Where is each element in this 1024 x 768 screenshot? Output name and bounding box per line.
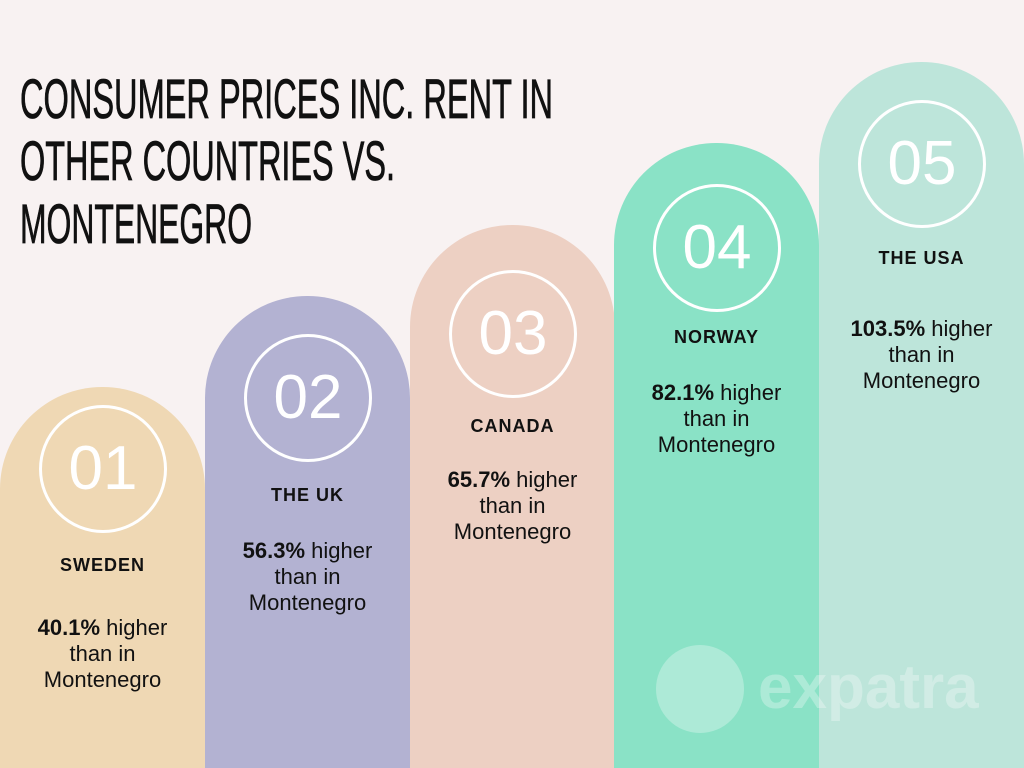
country label: SWEDEN [60, 555, 145, 575]
country label: THE UK [271, 485, 344, 505]
number 03: 03 [479, 299, 547, 368]
number 03 [449, 270, 577, 398]
country label: CANADA [470, 416, 554, 436]
title [20, 67, 553, 255]
panel: sweden [0, 387, 205, 768]
number 02 [244, 334, 372, 462]
watermark logo [656, 645, 979, 733]
panel: usa [819, 62, 1024, 768]
panel: canada [410, 225, 615, 768]
watermark logo: expatra [758, 653, 979, 722]
number 02: 02 [274, 363, 342, 432]
stat text: 103.5% higher than in Montenegro [851, 316, 992, 393]
title: MONTENEGRO [20, 192, 252, 255]
number 04 [653, 184, 781, 312]
stat text: 82.1% higher than in Montenegro [652, 380, 781, 457]
panel: norway [614, 143, 819, 768]
country label: THE USA [878, 248, 964, 268]
number 01 [39, 405, 167, 533]
number 04: 04 [683, 213, 751, 282]
number 01: 01 [69, 434, 137, 503]
stat text: 65.7% higher than in Montenegro [448, 467, 577, 544]
country label: NORWAY [674, 327, 759, 347]
stat text: 56.3% higher than in Montenegro [243, 538, 372, 615]
stat text: 40.1% higher than in Montenegro [38, 615, 167, 692]
number 05 [858, 100, 986, 228]
panel: uk [205, 296, 410, 768]
number 05: 05 [888, 129, 956, 198]
